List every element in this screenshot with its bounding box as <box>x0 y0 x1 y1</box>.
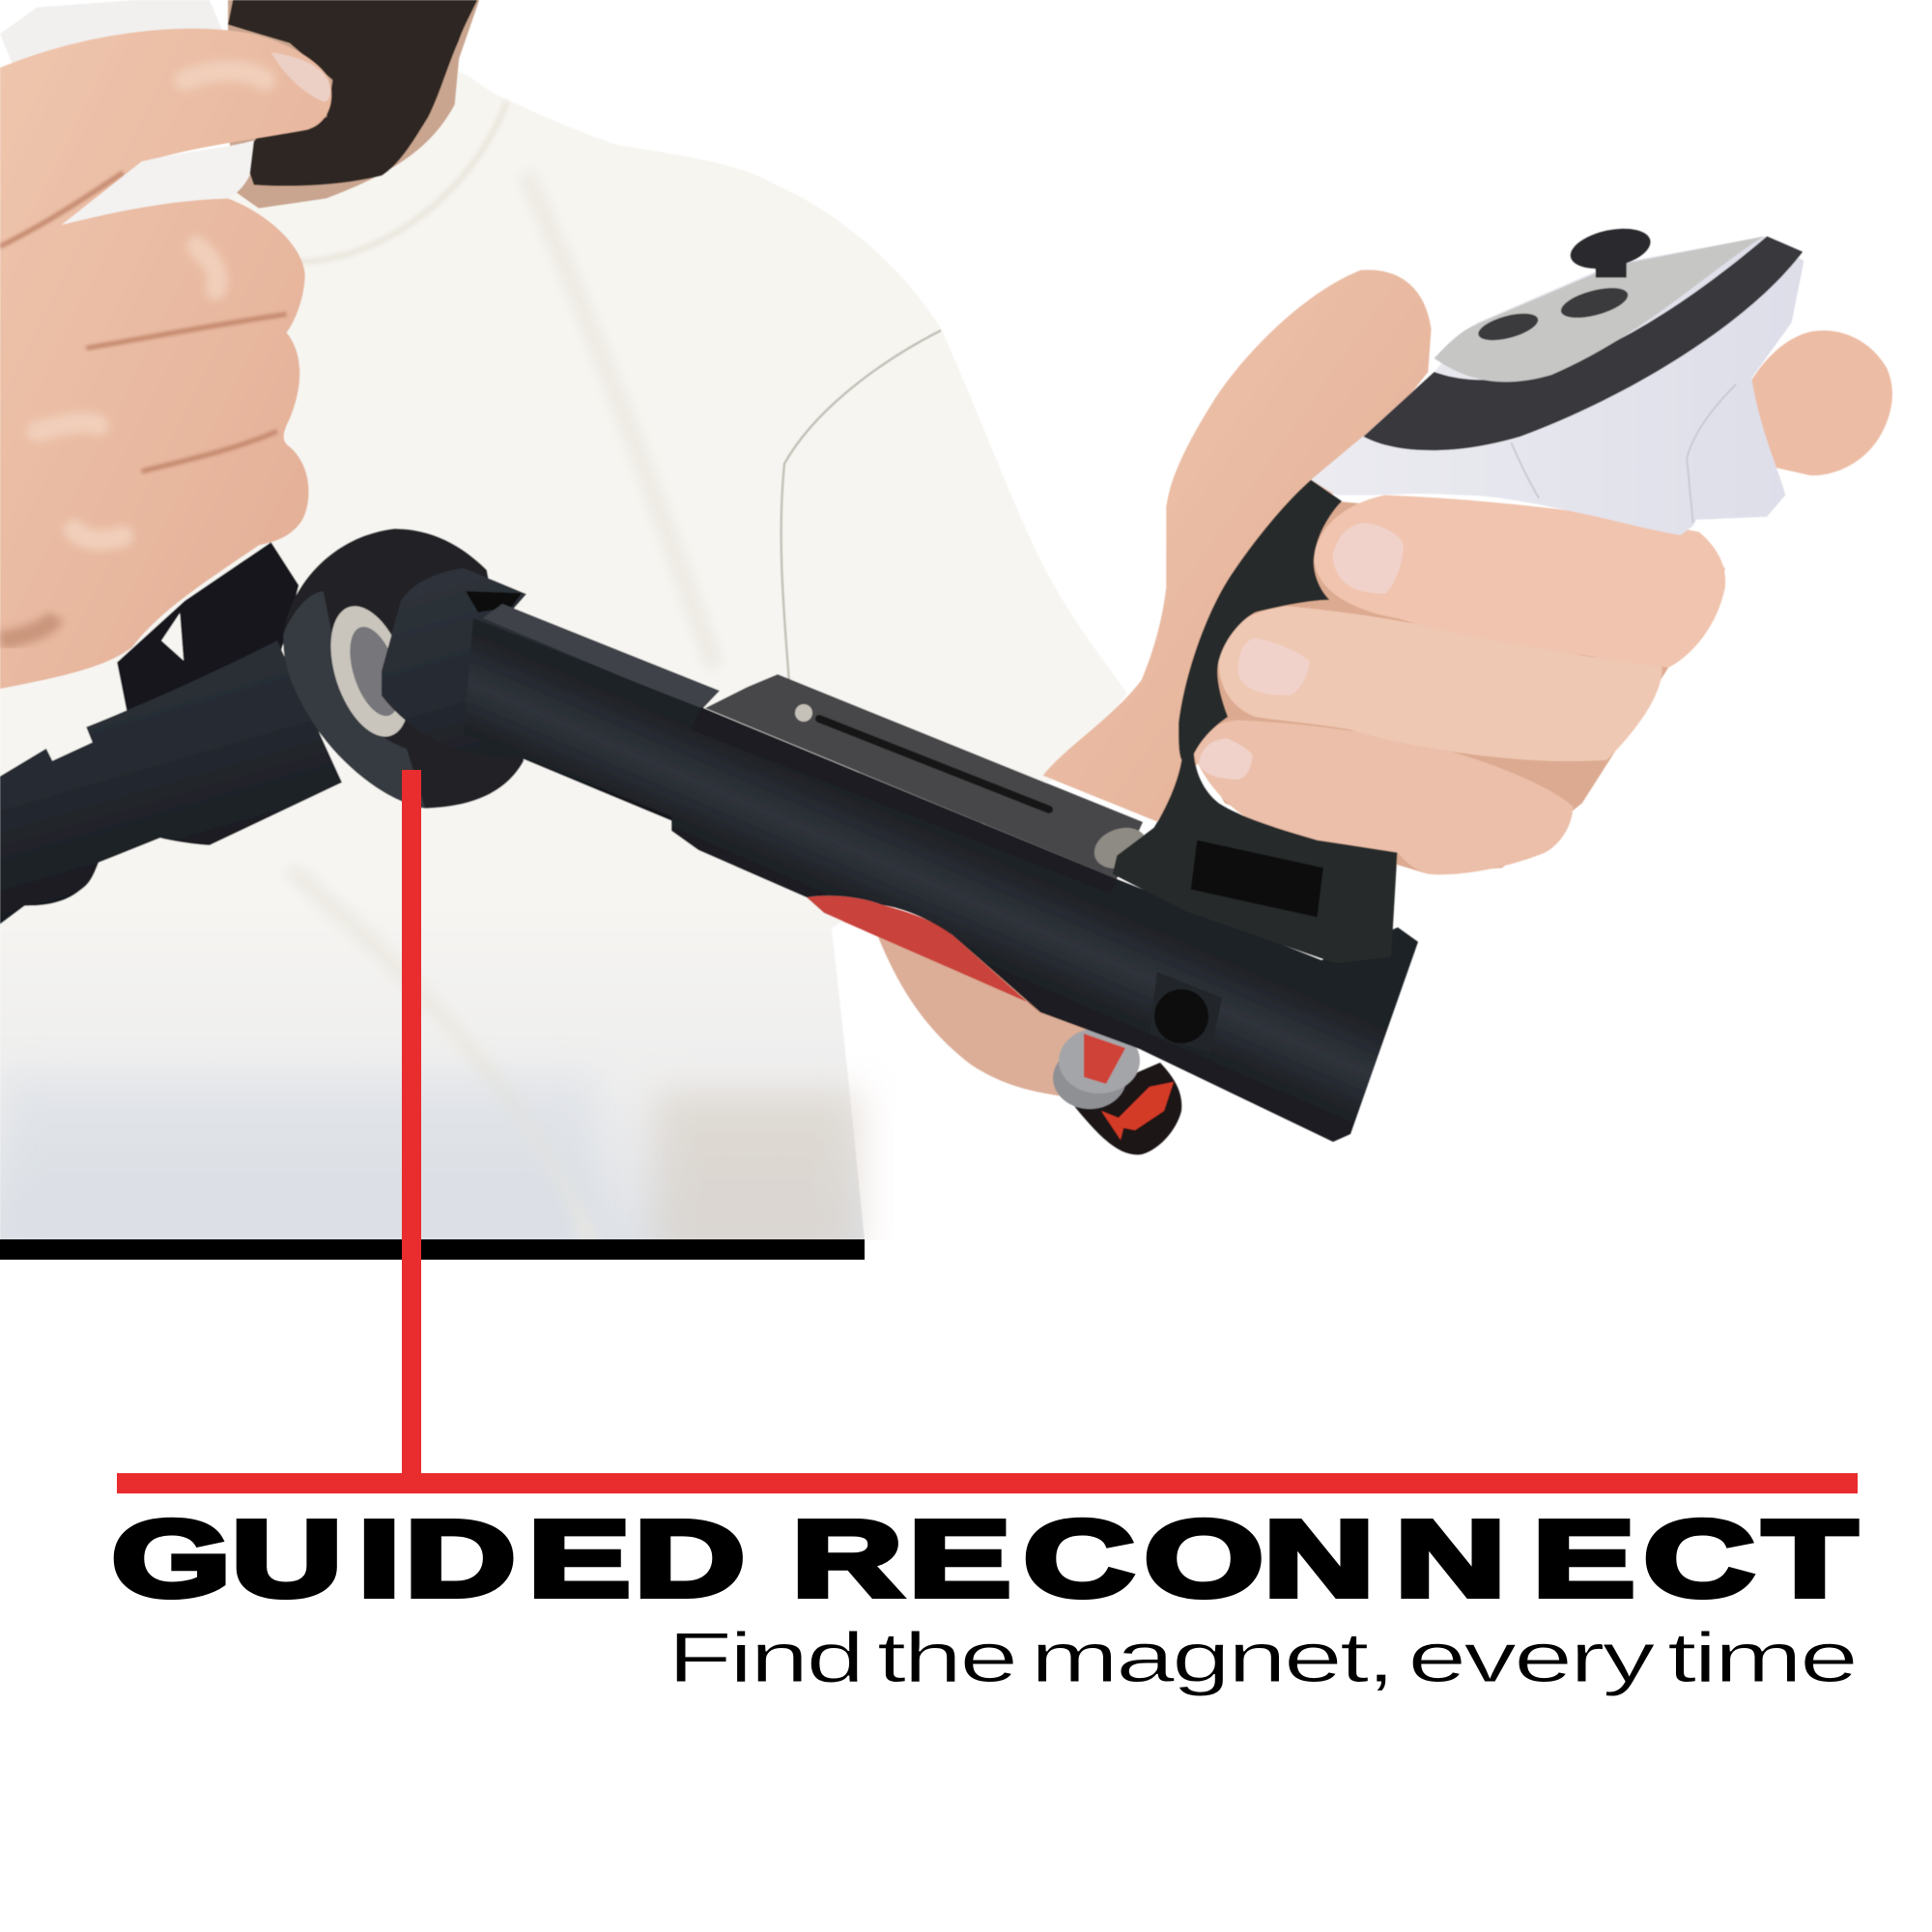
controller seam <box>1511 384 1736 523</box>
forearm <box>874 927 1140 1096</box>
finger shadows <box>0 173 287 471</box>
red callout vertical line <box>402 770 421 1475</box>
lower shirt beige tone <box>657 1092 860 1256</box>
neck and chin <box>228 0 479 209</box>
silver ring <box>1089 821 1152 875</box>
disk rim <box>283 591 425 809</box>
grip window <box>1191 840 1323 917</box>
photo: man holding controller grip <box>0 0 1892 1256</box>
red strap <box>807 895 1043 1016</box>
left tube <box>0 640 342 924</box>
palm and thumb <box>1043 270 1432 822</box>
screw <box>795 704 812 722</box>
wrist shadow <box>0 616 55 640</box>
red callout horizontal line <box>117 1473 1858 1493</box>
magnet inner <box>340 621 410 722</box>
right hand and controller <box>1043 222 1892 963</box>
ring nail <box>1199 738 1253 780</box>
nails <box>1199 523 1404 780</box>
controller body <box>1311 237 1804 535</box>
title: GUIDED RECONNECT <box>111 1498 1857 1619</box>
controller dark band <box>1363 237 1803 450</box>
ring finger <box>1194 720 1573 874</box>
t-shirt <box>0 71 1127 1240</box>
tool upper disc <box>1059 1028 1140 1094</box>
button b <box>1558 282 1631 324</box>
disk <box>283 528 524 809</box>
bar main body <box>464 618 1418 1142</box>
bar top plate <box>705 674 1143 879</box>
index finger <box>1314 496 1725 668</box>
thumbstick stem <box>1596 258 1627 277</box>
grip <box>1113 480 1397 963</box>
left hand nail <box>271 52 330 101</box>
black base line <box>0 1239 865 1260</box>
knuckle highlights <box>37 71 265 540</box>
side hole <box>1154 989 1208 1043</box>
lower shirt grey tone <box>10 1081 589 1217</box>
shirt shading <box>0 101 941 1256</box>
pinky <box>1743 330 1892 475</box>
slot <box>819 719 1049 810</box>
collar seam <box>280 101 507 262</box>
controller top face <box>1435 237 1764 382</box>
subtitle: Find the magnet, every time <box>668 1619 1856 1697</box>
sleeve seam <box>781 330 941 696</box>
left hand <box>0 29 331 689</box>
fold shadows <box>290 178 717 1072</box>
main tube cap <box>382 568 696 831</box>
finger gap backing <box>1194 501 1725 874</box>
upper tube grey strip <box>483 604 720 710</box>
side hole bump <box>1150 972 1222 1053</box>
middle finger <box>1218 606 1662 761</box>
rear arm bracket <box>117 542 298 739</box>
index nail <box>1332 523 1404 594</box>
button a <box>1475 308 1541 346</box>
tool handle <box>1070 1063 1181 1154</box>
tool handle red pattern <box>1101 1082 1174 1140</box>
middle nail <box>1238 638 1310 696</box>
left hand details <box>0 71 287 640</box>
screwdriver tool <box>1053 1028 1181 1154</box>
cap notch <box>466 591 522 612</box>
upper left controller <box>0 0 225 124</box>
plate front face <box>691 707 1117 894</box>
tool lower disc <box>1053 1047 1126 1109</box>
left hand controller ring <box>62 140 254 225</box>
thumbstick <box>1567 222 1654 275</box>
beard <box>228 0 477 186</box>
tool red label <box>1084 1034 1125 1084</box>
magnet <box>316 596 424 747</box>
